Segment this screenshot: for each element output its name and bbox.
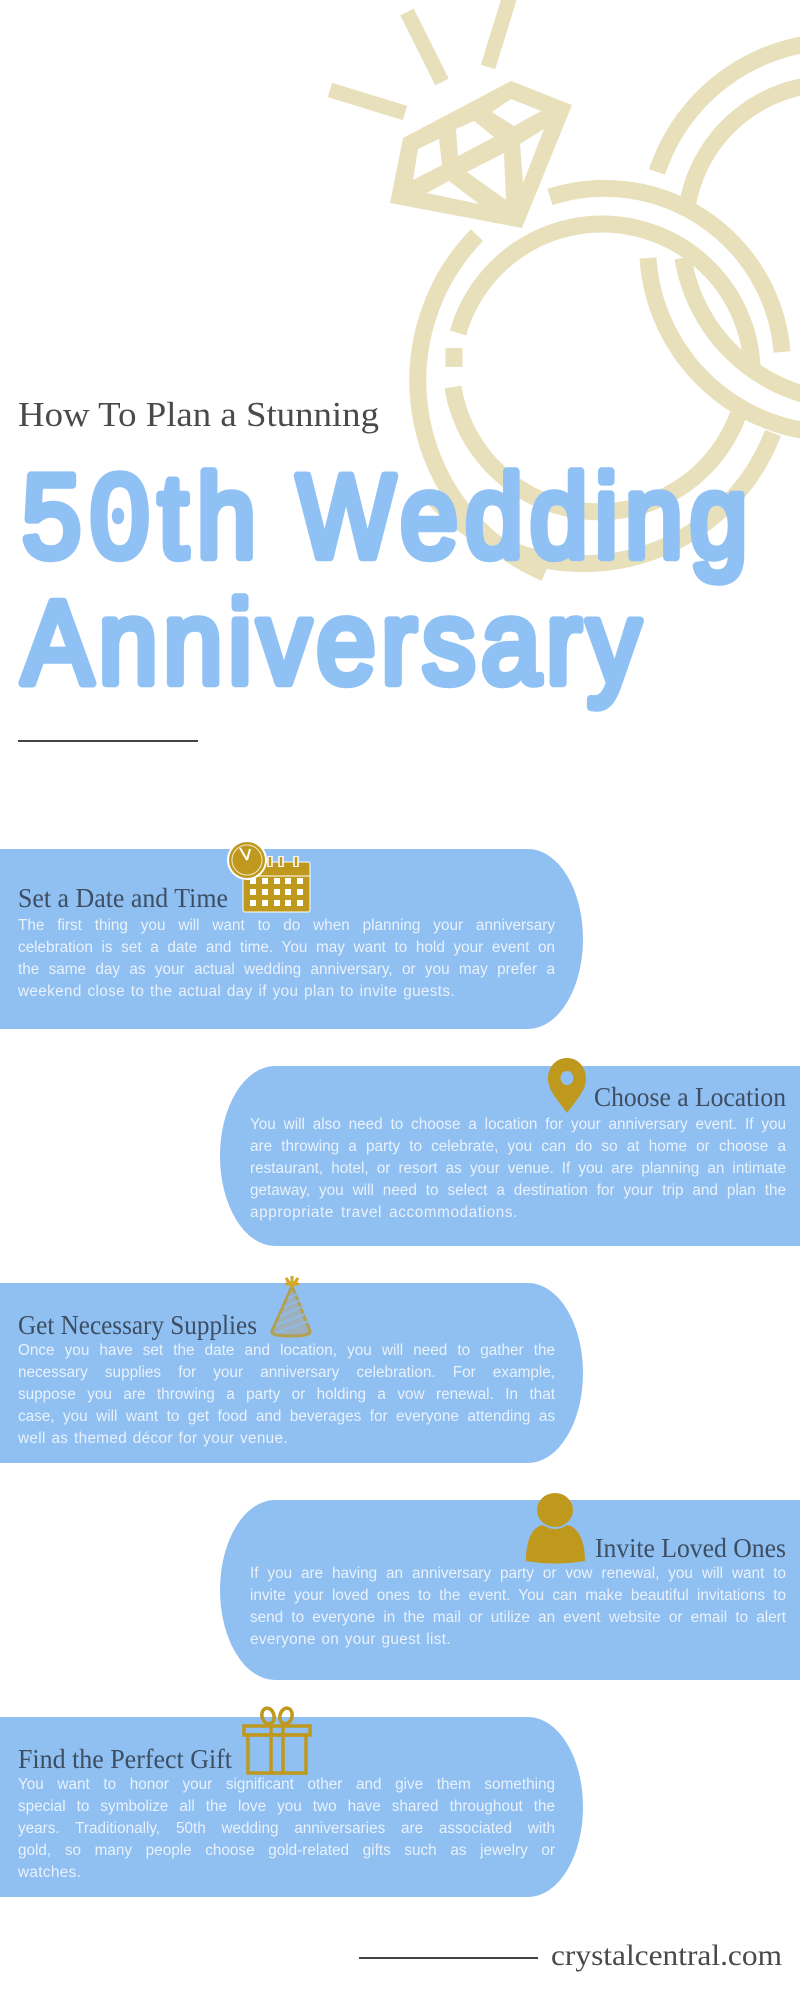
icon: party hat xyxy=(272,1276,310,1336)
text: invite loved ones xyxy=(250,1565,786,1648)
text: get necessary supplies: well as themed décor for your venue. xyxy=(18,1430,288,1447)
text: invite loved ones: invite your loved ones to the event. You can make beautiful invitations to xyxy=(250,1587,786,1604)
heading: choose a location: Choose a Location xyxy=(594,1082,786,1112)
heading: set a date and time: Set a Date and Time xyxy=(18,883,228,913)
title block xyxy=(18,395,748,712)
heading: get necessary supplies: Get Necessary Supplies xyxy=(18,1310,257,1340)
text: find the perfect gift xyxy=(18,1776,555,1881)
text: choose a location: You will also need to choose a location for your anniversary event. If you xyxy=(250,1116,786,1133)
panel: find the perfect gift xyxy=(0,1706,583,1897)
panel: get necessary supplies xyxy=(0,1276,583,1463)
heading: find the perfect gift: Find the Perfect Gift xyxy=(18,1744,232,1774)
text: find the perfect gift: years. Traditionally, 50th wedding anniversaries are associated with xyxy=(18,1820,555,1837)
heading: invite loved ones: Invite Loved Ones xyxy=(595,1533,786,1563)
text: find the perfect gift: watches. xyxy=(18,1864,81,1881)
text: set a date and time: The first thing you will want to do when planning your anniversary xyxy=(18,917,555,934)
text: set a date and time: the same day as your actual wedding anniversary, or you may prefer a xyxy=(18,961,555,978)
main title: Anniversary xyxy=(22,576,640,708)
text: get necessary supplies: suppose you are throwing a party or holding a vow renewal. In that xyxy=(18,1386,555,1403)
text: find the perfect gift: gold, so many people choose gold-related gifts such as jewelry or xyxy=(18,1842,555,1859)
illustration: diamond wedding rings xyxy=(328,0,800,581)
text: find the perfect gift: special to symbolize all the love you two have shared throughout the xyxy=(18,1798,555,1815)
icon: gift box xyxy=(244,1707,310,1773)
text: find the perfect gift: You want to honor your significant other and give them something xyxy=(18,1776,555,1793)
icon: calendar and clock xyxy=(228,841,310,912)
text: choose a location: getaway, you will need to select a destination for your trip and plan the xyxy=(250,1182,786,1199)
panel: invite loved ones xyxy=(220,1493,800,1680)
text: set a date and time: celebration is set a date and time. You may want to hold your event on xyxy=(18,939,555,956)
icon: person xyxy=(526,1493,585,1564)
panel: set a date and time xyxy=(0,842,583,1029)
text: invite loved ones: everyone on your guest list. xyxy=(250,1631,451,1648)
text: set a date and time: weekend close to the actual day if you plan to invite guests. xyxy=(18,983,455,1000)
text: get necessary supplies xyxy=(18,1342,555,1447)
main title: Wedding xyxy=(297,450,748,582)
panel: choose a location xyxy=(220,1058,800,1246)
icon: location pin xyxy=(548,1058,586,1113)
subtitle: How To Plan a Stunning xyxy=(18,395,379,434)
footer: website: crystalcentral.com xyxy=(551,1939,782,1972)
text: set a date and time xyxy=(18,917,555,1000)
divider xyxy=(18,740,198,742)
main title xyxy=(22,450,748,708)
text: choose a location: are throwing a party to celebrate, you can do so at home or choose a xyxy=(250,1138,786,1155)
text: invite loved ones: If you are having an anniversary party or vow renewal, you will want to xyxy=(250,1565,786,1582)
text: invite loved ones: send to everyone in the mail or utilize an event website or email to alert xyxy=(250,1609,786,1626)
icon: interlocked rings xyxy=(418,42,800,573)
text: choose a location: appropriate travel accommodations. xyxy=(250,1204,518,1221)
icon: diamond with rays xyxy=(330,0,572,228)
text: get necessary supplies: case, you will want to get food and beverages for everyone attending as xyxy=(18,1408,555,1425)
text: choose a location: restaurant, hotel, or resort as your venue. If you are planning an intimate xyxy=(250,1160,786,1177)
text: get necessary supplies: Once you have set the date and location, you will need to gather the xyxy=(18,1342,555,1359)
main title: 50th xyxy=(22,450,256,582)
text: get necessary supplies: necessary supplies for your anniversary celebration. For example, xyxy=(18,1364,555,1381)
text: choose a location xyxy=(250,1116,786,1221)
